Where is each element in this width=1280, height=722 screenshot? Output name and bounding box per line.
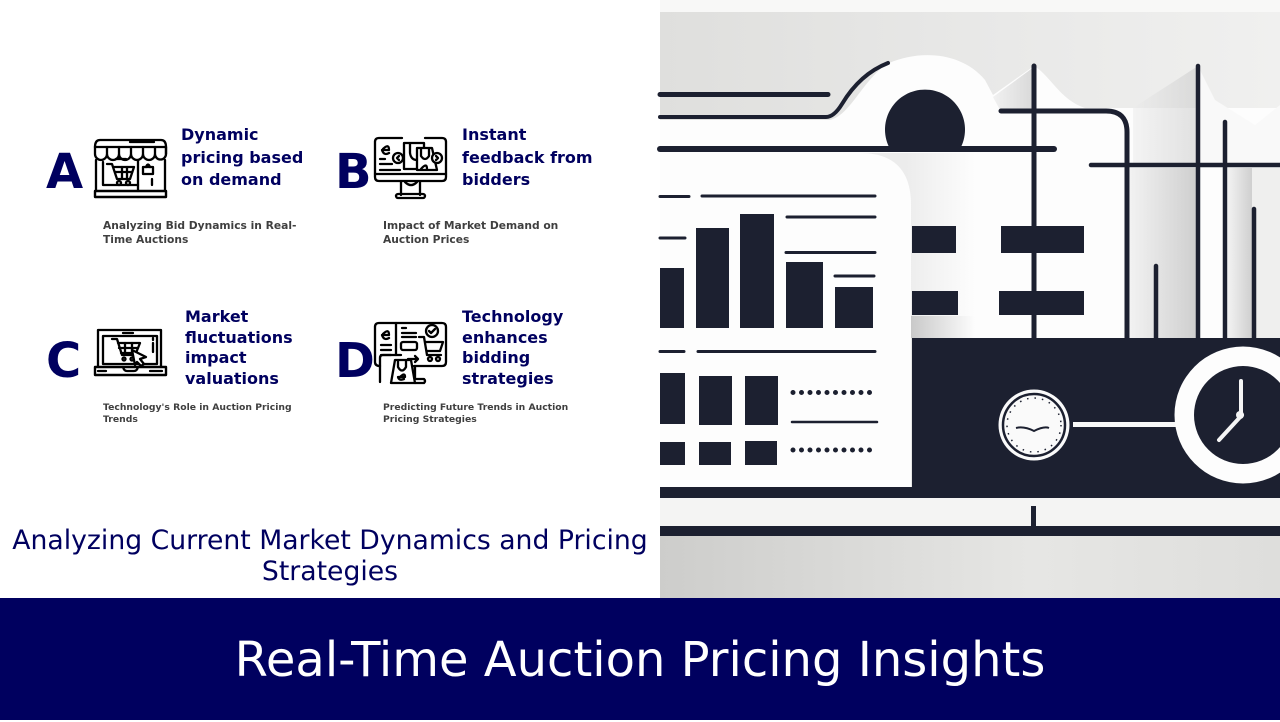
panel: content grid: [0, 0, 660, 598]
icon: laptop with cart: [94, 328, 168, 376]
subheading B: Impact of Market Demand on: [383, 219, 558, 232]
heading D: bidding: [462, 348, 530, 367]
subheading C: Technology's Role in Auction Pricing: [103, 402, 292, 413]
heading A: pricing based: [181, 148, 303, 167]
heading D: enhances: [462, 328, 548, 347]
dark timeline band: [660, 338, 1280, 498]
subheading D: [383, 402, 568, 425]
item C: [46, 307, 293, 425]
subheading D: Pricing Strategies: [383, 414, 477, 425]
subheading B: Auction Prices: [383, 233, 469, 246]
heading D: Technology: [462, 307, 563, 326]
icon: monitor with shopping bags: [374, 136, 448, 200]
item B: [335, 125, 593, 246]
subheading A: Time Auctions: [103, 233, 188, 246]
icon: small clock: [998, 390, 1070, 460]
heading D: [462, 307, 563, 388]
heading C: impact: [185, 348, 247, 367]
letter A: A: [46, 144, 83, 200]
subheading C: Trends: [103, 414, 138, 425]
icon: monitor with cart and bags: [374, 322, 448, 384]
dark rectangles: [912, 226, 1084, 315]
letter B: B: [335, 144, 372, 200]
heading C: [185, 307, 293, 388]
heading A: on demand: [181, 170, 282, 189]
illustration: abstract dashboard with clocks: [657, 12, 1280, 598]
card text lines: [660, 196, 877, 450]
top lines: [660, 63, 888, 117]
subheading D: Predicting Future Trends in Auction: [383, 402, 568, 413]
bar chart: [660, 214, 873, 328]
letter C: C: [46, 333, 81, 389]
item D: [335, 307, 568, 425]
grid lines: [660, 66, 1280, 338]
bottom rail: [660, 526, 1280, 536]
icon: large clock: [1174, 346, 1280, 484]
table squares: [660, 373, 778, 465]
heading C: valuations: [185, 369, 279, 388]
icon: storefront with cart: [94, 138, 168, 198]
heading C: Market: [185, 307, 248, 326]
white raised shapes: [660, 55, 1280, 338]
item A: [46, 125, 303, 246]
heading B: feedback from: [462, 148, 593, 167]
heading A: [181, 125, 303, 189]
heading C: fluctuations: [185, 328, 293, 347]
title bar: Real-Time Auction Pricing Insights: [235, 632, 1045, 688]
title bar: [0, 598, 1280, 720]
heading D: strategies: [462, 369, 554, 388]
subheading C: [103, 402, 292, 425]
section subtitle: Analyzing Current Market Dynamics and Pricing Strategies: [12, 525, 648, 587]
subheading A: Analyzing Bid Dynamics in Real-: [103, 219, 296, 232]
subheading B: [383, 219, 558, 246]
heading B: [462, 125, 593, 189]
heading B: bidders: [462, 170, 530, 189]
subheading A: [103, 219, 296, 246]
sun circle: [885, 90, 965, 147]
letter D: D: [335, 333, 375, 389]
card: [660, 153, 911, 487]
heading A: Dynamic: [181, 125, 259, 144]
heading B: Instant: [462, 125, 526, 144]
connector: [1073, 422, 1177, 427]
